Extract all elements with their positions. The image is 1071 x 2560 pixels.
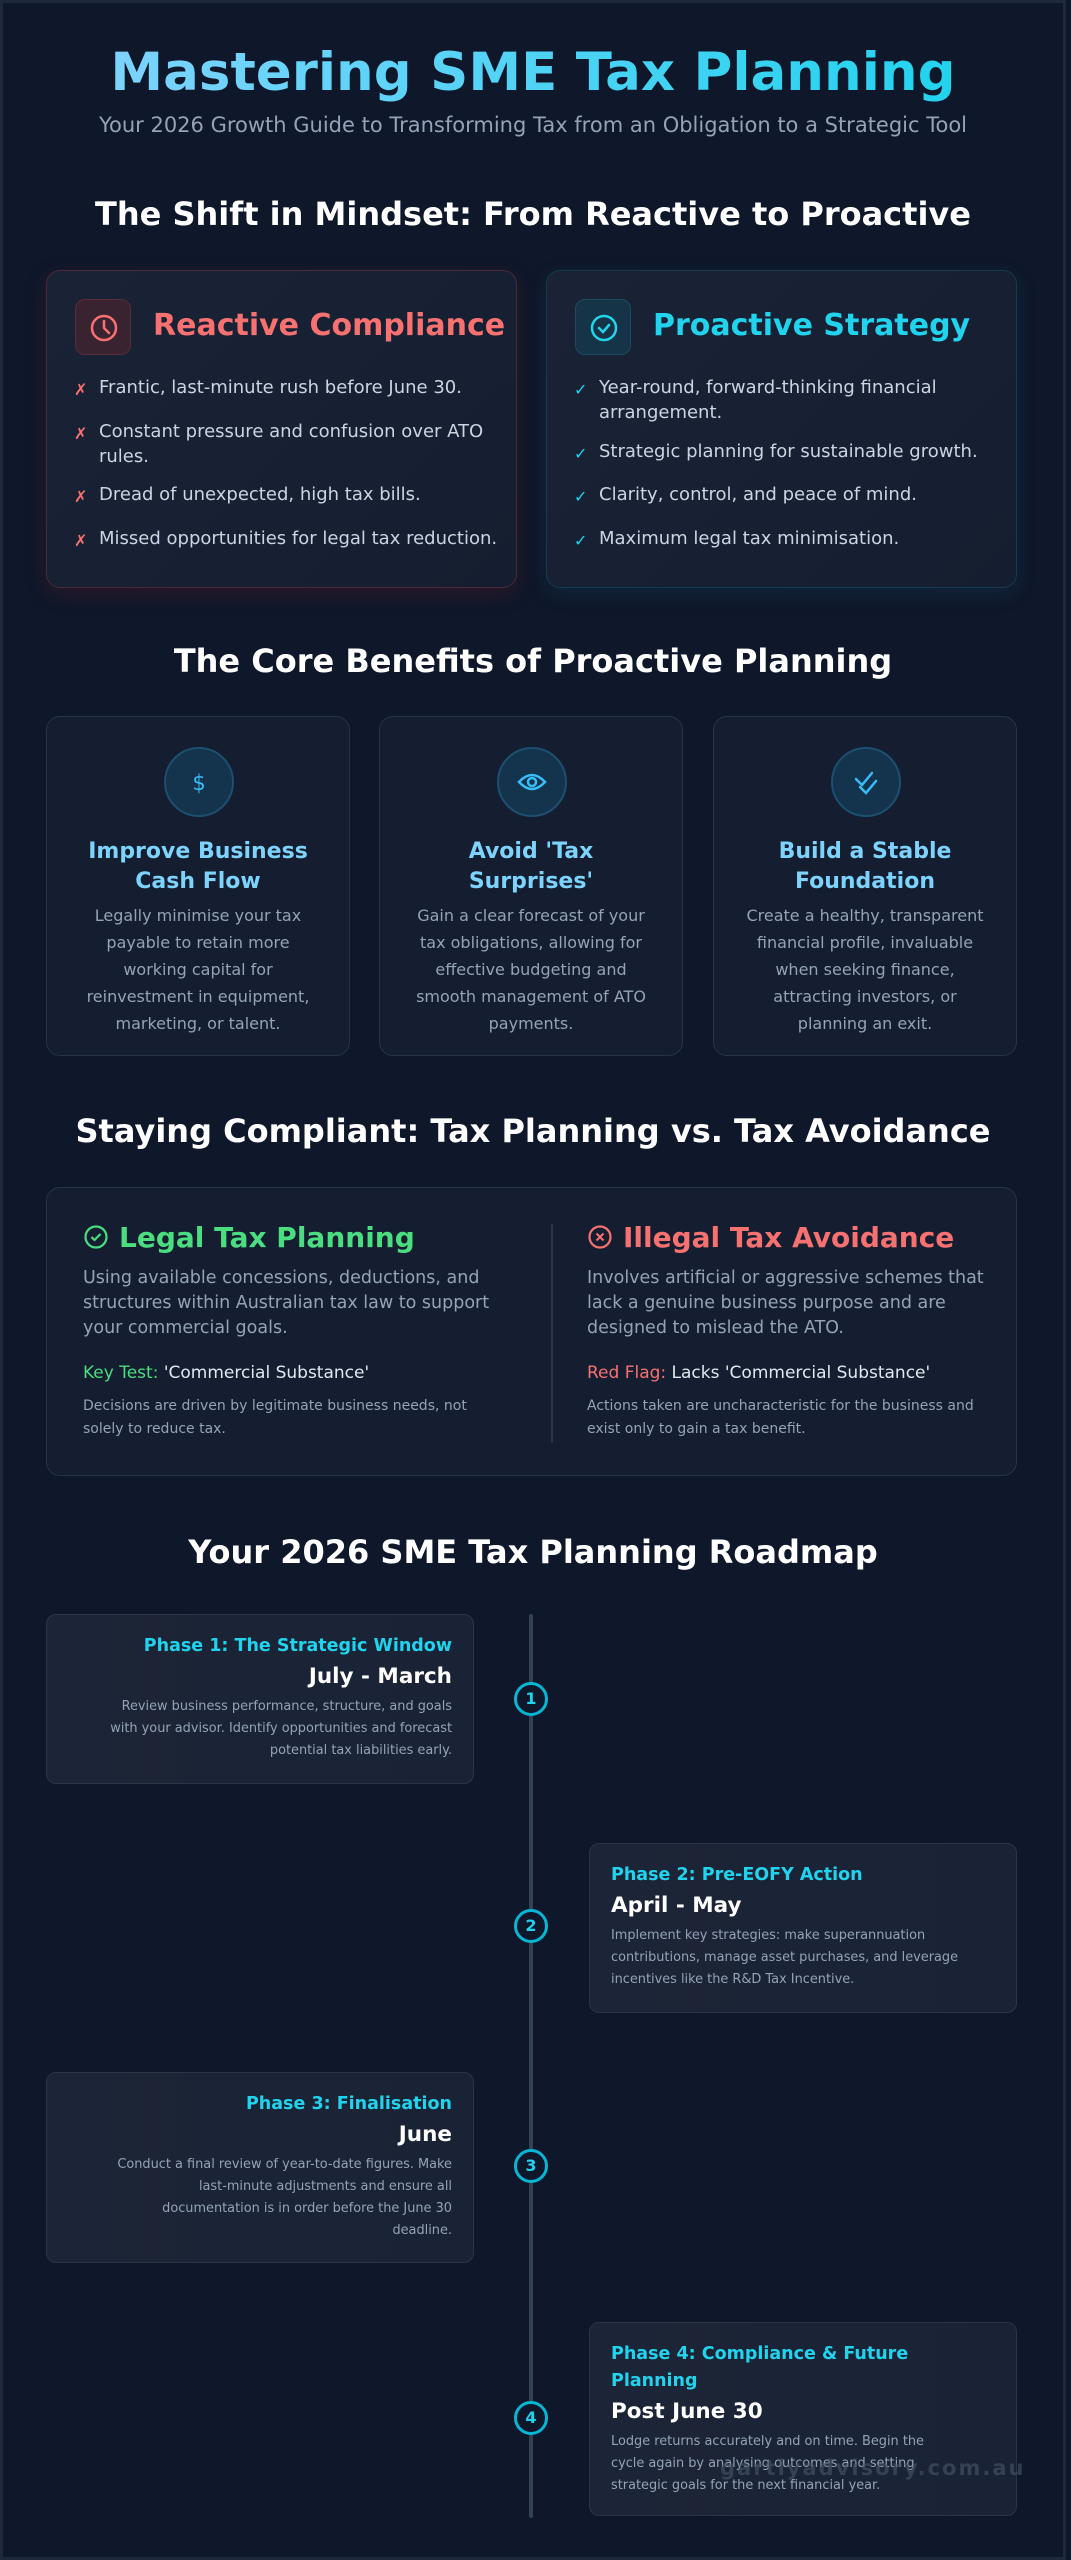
- phase 2: contributions, manage asset purchases, and leverage: [611, 1950, 958, 1965]
- icon: check circle: [575, 299, 631, 355]
- phase 3: Phase 3: Finalisation: [246, 2094, 452, 2114]
- panel: proactive strategy: [546, 270, 1017, 588]
- bullet list: Clarity, control, and peace of mind.: [599, 484, 917, 505]
- panel: reactive compliance: [46, 270, 517, 588]
- panel: cash flow: Improve Business: [88, 839, 308, 864]
- bullet list: Strategic planning for sustainable growth.: [599, 441, 978, 462]
- bullet list: Constant pressure and confusion over ATO rules.: [99, 421, 483, 467]
- marker 1: 1: [525, 1689, 537, 1708]
- watermark: gartlyadvisory.com.au: [720, 2456, 1025, 2480]
- column: legal: Using available concessions, deductions, and structures within Australian tax law to support your commercial goals.: [83, 1268, 489, 1338]
- panel: cash flow: Legally minimise your tax payable to retain more working capital for reinvestment in equipment, marketing, or talent.: [87, 906, 309, 1033]
- marker 3: 3: [525, 2156, 537, 2175]
- bullet list: Year-round, forward-thinking financial arrangement.: [599, 377, 937, 423]
- column: legal: [83, 1221, 489, 1437]
- marker 1: [514, 1682, 548, 1716]
- column: illegal: Actions taken are uncharacteristic for the business and exist only to gain a tax benefit.: [587, 1398, 974, 1437]
- phase 4: Lodge returns accurately and on time. Begin the: [611, 2434, 924, 2449]
- marker 4: [514, 2401, 548, 2435]
- marker 4: 4: [525, 2408, 537, 2427]
- panel: stable foundation: [713, 716, 1017, 1056]
- heading: Reactive Compliance: [153, 308, 505, 343]
- heading: roadmap: Your 2026 SME Tax Planning Roadmap: [188, 1533, 878, 1571]
- phase 1: [46, 1614, 474, 1784]
- bullet list: Dread of unexpected, high tax bills.: [99, 484, 421, 505]
- icon: eye: [497, 747, 567, 817]
- phase 3: deadline.: [392, 2223, 452, 2238]
- phase 2: Implement key strategies: make superannuation: [611, 1928, 925, 1943]
- column: illegal: Illegal Tax Avoidance: [623, 1221, 954, 1254]
- panel: reactive compliance: ✗: [74, 424, 87, 443]
- bullet list: [74, 377, 497, 550]
- phase 3: [46, 2072, 474, 2263]
- icon: clock: [75, 299, 131, 355]
- phase 4: Planning: [611, 2371, 698, 2391]
- icon: double check: [831, 747, 901, 817]
- phase 4: strategic goals for the next financial year.: [611, 2478, 880, 2493]
- heading: Proactive Strategy: [653, 308, 970, 343]
- panel: tax surprises: Gain a clear forecast of your tax obligations, allowing for effective budgeting and smooth management of ATO payments.: [416, 906, 646, 1033]
- panel: tax surprises: [379, 716, 683, 1056]
- bullet list: Missed opportunities for legal tax reduction.: [99, 528, 497, 549]
- panel: proactive strategy: ✓: [574, 531, 587, 550]
- panel: proactive strategy: ✓: [574, 380, 587, 399]
- phase 3: June: [399, 2122, 452, 2147]
- heading: staying compliant: Staying Compliant: Tax Planning vs. Tax Avoidance: [76, 1112, 990, 1150]
- phase 3: Conduct a final review of year-to-date figures. Make: [117, 2157, 452, 2172]
- column: illegal: Red Flag: Lacks 'Commercial Substance': [587, 1363, 930, 1383]
- panel: proactive strategy: ✓: [574, 444, 587, 463]
- marker 2: 2: [525, 1916, 537, 1935]
- phase 2: incentives like the R&D Tax Incentive.: [611, 1972, 854, 1987]
- phase 1: July - March: [309, 1664, 452, 1689]
- panel: reactive compliance: ✗: [74, 487, 87, 506]
- column: illegal: [587, 1221, 984, 1437]
- title: Mastering SME Tax Planning: [110, 42, 956, 103]
- panel: cash flow: Cash Flow: [135, 869, 261, 894]
- timeline line: [529, 1614, 533, 2518]
- phase 3: last-minute adjustments and ensure all: [199, 2179, 452, 2194]
- column: legal: Key Test: 'Commercial Substance': [83, 1363, 369, 1383]
- panel: stable foundation: Build a Stable: [779, 839, 951, 864]
- column: legal: Legal Tax Planning: [119, 1221, 415, 1254]
- panel: reactive compliance: ✗: [74, 531, 87, 550]
- panel: reactive compliance: ✗: [74, 380, 87, 399]
- icon: dollar: $: [192, 771, 206, 795]
- heading: core benefits: The Core Benefits of Proactive Planning: [174, 642, 892, 680]
- bullet list: Maximum legal tax minimisation.: [599, 528, 899, 549]
- panel: stable foundation: Foundation: [795, 869, 935, 894]
- phase 1: with your advisor. Identify opportunities and forecast: [110, 1721, 452, 1736]
- column: legal: Decisions are driven by legitimate business needs, not solely to reduce tax.: [83, 1398, 467, 1437]
- phase 4: cycle again by analysing outcomes and setting: [611, 2456, 915, 2471]
- marker 3: [514, 2149, 548, 2183]
- panel: proactive strategy: ✓: [574, 487, 587, 506]
- phase 4: Phase 4: Compliance & Future: [611, 2344, 908, 2364]
- phase 2: [589, 1843, 1017, 2013]
- bullet list: Frantic, last-minute rush before June 30.: [99, 377, 462, 398]
- phase 2: April - May: [611, 1893, 742, 1918]
- subtitle: Your 2026 Growth Guide to Transforming Tax from an Obligation to a Strategic Tool: [99, 113, 967, 137]
- phase 2: Phase 2: Pre-EOFY Action: [611, 1865, 863, 1885]
- panel: tax surprises: Surprises': [469, 869, 593, 894]
- panel: cash flow: [46, 716, 350, 1056]
- marker 2: [514, 1909, 548, 1943]
- panel: stable foundation: Create a healthy, transparent financial profile, invaluable when seeking finance, attracting investors, or planning an exit.: [746, 906, 984, 1033]
- heading: shift in mindset: The Shift in Mindset: From Reactive to Proactive: [95, 195, 971, 233]
- phase 1: potential tax liabilities early.: [270, 1743, 452, 1758]
- phase 3: documentation is in order before the June 30: [162, 2201, 452, 2216]
- phase 4: [589, 2322, 1017, 2516]
- phase 1: Phase 1: The Strategic Window: [144, 1636, 452, 1656]
- panel: comparison: [46, 1187, 1017, 1476]
- column: illegal: Involves artificial or aggressive schemes that lack a genuine business purpose and are designed to mislead the ATO.: [587, 1268, 984, 1338]
- bullet list: [574, 377, 978, 550]
- panel: tax surprises: Avoid 'Tax: [469, 839, 593, 864]
- phase 4: Post June 30: [611, 2399, 763, 2424]
- icon: dollar: [164, 747, 234, 817]
- phase 1: Review business performance, structure, and goals: [122, 1699, 452, 1714]
